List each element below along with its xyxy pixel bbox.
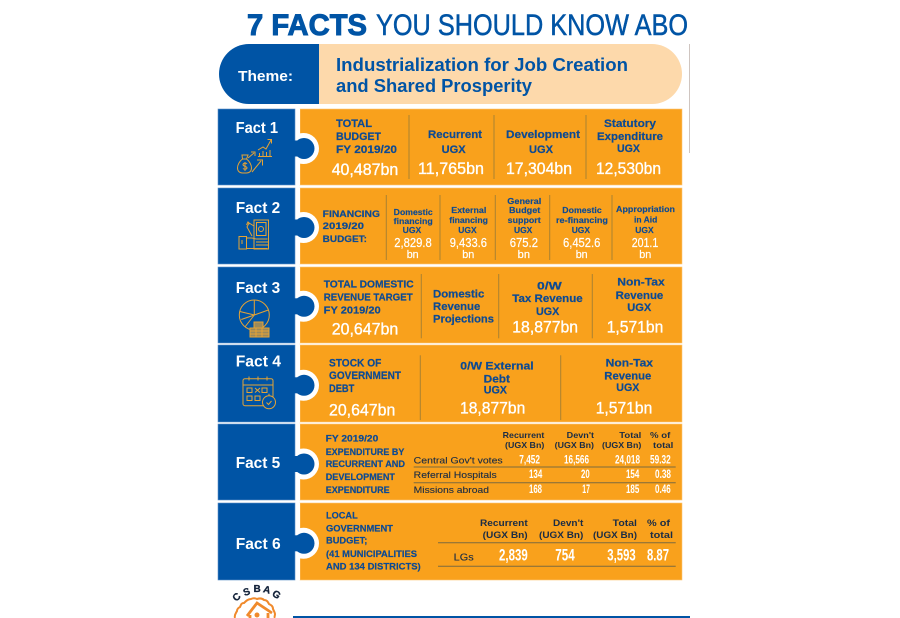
panel: fact 3: Tax Revenue	[512, 293, 583, 305]
panel: fact 2: BUDGET:	[323, 234, 367, 245]
panel: fact 2: bn	[462, 249, 474, 261]
panel: fact 5: Fact 5	[236, 455, 280, 472]
panel: fact 3	[218, 267, 682, 343]
table: local government budget: Recurrent	[480, 518, 529, 529]
logo: CSBAG: G	[270, 588, 283, 602]
panel: fact 5: EXPENDITURE	[326, 485, 390, 496]
panel: fact 2: bn	[576, 249, 588, 261]
panel: fact 1: Recurrent	[428, 129, 482, 141]
panel: fact 4: Fact 4	[236, 354, 281, 371]
panel: fact 5: FY 2019/20	[326, 434, 378, 445]
theme banner: and Shared Prosperity	[336, 76, 532, 96]
panel: fact 2: Domestic	[562, 205, 602, 215]
panel: fact 4: UGX	[616, 382, 640, 394]
panel: fact 3: Domestic	[433, 289, 484, 301]
table: expenditure by recurrent and development: 185	[626, 484, 640, 496]
panel: fact 3: Fact 3	[236, 280, 280, 297]
panel: fact 4: GOVERNMENT	[329, 370, 401, 382]
table: expenditure by recurrent and development: Total	[619, 430, 641, 440]
panel: fact 2: bn	[639, 249, 651, 261]
panel: fact 2: UGX	[458, 225, 477, 235]
panel: fact 2: 2019/20	[323, 221, 364, 232]
panel: fact 3: 18,877bn	[512, 318, 578, 337]
theme banner: Industrialization for Job Creation	[336, 55, 628, 75]
icon: calendar and stopwatch	[243, 376, 276, 409]
panel: fact 6: (41 MUNICIPALITIES	[326, 549, 417, 560]
panel: fact 3: Non-Tax	[617, 277, 666, 289]
table: expenditure by recurrent and development: total	[653, 440, 673, 450]
table: local government budget: LGs	[454, 552, 474, 564]
panel: fact 3: UGX	[627, 302, 652, 314]
table: expenditure by recurrent and development: 0.46	[655, 484, 671, 496]
panel: fact 6: BUDGET;	[326, 536, 367, 547]
panel: fact 1: Development	[506, 129, 580, 141]
panel: fact 3: Projections	[433, 314, 494, 326]
panel: fact 2: in Aid	[634, 215, 657, 225]
table: local government budget: (UGX Bn)	[539, 530, 583, 541]
table: local government budget: % of	[647, 518, 671, 529]
table: expenditure by recurrent and development	[414, 430, 676, 496]
panel: fact 5: DEVELOPMENT	[326, 472, 395, 483]
table: local government budget	[438, 518, 676, 566]
panel: fact 2: re-financing	[556, 215, 608, 225]
panel: fact 1: UGX	[529, 144, 554, 156]
panel: fact 6: GOVERNMENT	[326, 524, 393, 535]
table: expenditure by recurrent and development: 59.32	[650, 455, 671, 467]
footer rule	[293, 616, 690, 618]
table: expenditure by recurrent and development: Devn't	[567, 430, 594, 440]
title	[248, 14, 688, 36]
panel: fact 3: TOTAL DOMESTIC	[324, 279, 414, 291]
table: expenditure by recurrent and development: Central Gov't votes	[414, 456, 503, 467]
panel: fact 6: AND 134 DISTRICTS)	[326, 562, 421, 573]
table: expenditure by recurrent and development: 154	[626, 469, 640, 481]
panel: fact 2: Fact 2	[236, 200, 280, 217]
theme banner	[219, 44, 682, 104]
panel: fact 1: BUDGET	[336, 131, 381, 143]
panel: fact 2: financing	[449, 215, 488, 225]
panel: fact 4: 1,571bn	[596, 398, 652, 417]
panel: fact 1: TOTAL	[336, 118, 372, 130]
panel: fact 2: bn	[407, 249, 419, 261]
table: expenditure by recurrent and development: 168	[529, 484, 542, 496]
panel: fact 1: FY 2019/20	[336, 144, 397, 156]
table: expenditure by recurrent and development: 134	[529, 469, 543, 481]
panel: fact 2: bn	[518, 249, 530, 261]
title: YOU SHOULD KNOW ABO	[376, 9, 688, 42]
panel: fact 2: Budget	[509, 205, 540, 215]
panel: fact 2: UGX	[403, 225, 422, 235]
table: local government budget: (UGX Bn)	[593, 530, 637, 541]
panel: fact 4: UGX	[484, 385, 508, 397]
table: expenditure by recurrent and development: 7,452	[519, 455, 540, 467]
panel: fact 1: 17,304bn	[506, 159, 572, 178]
panel: fact 2: 201.1	[632, 235, 658, 250]
table: expenditure by recurrent and development: 20	[581, 469, 590, 481]
panel: fact 2: UGX	[635, 225, 654, 235]
table: expenditure by recurrent and development: (UGX Bn)	[505, 440, 544, 450]
panel: fact 1: Statutory	[604, 118, 657, 130]
panel: fact 6: LOCAL	[326, 511, 358, 522]
table: expenditure by recurrent and development: Recurrent	[503, 430, 544, 440]
table: local government budget: (UGX Bn)	[483, 530, 528, 541]
table: expenditure by recurrent and development: 24,018	[615, 455, 640, 467]
table: expenditure by recurrent and development: Missions abroad	[414, 485, 489, 496]
panel: fact 1: UGX	[442, 144, 466, 156]
panel: fact 2: UGX	[514, 225, 533, 235]
panel: fact 1: 12,530bn	[596, 159, 661, 178]
title: 7 FACTS	[247, 9, 367, 42]
panel: fact 1: Fact 1	[236, 120, 278, 137]
table: local government budget: Devn't	[553, 518, 584, 529]
table: local government budget: 8.87	[647, 547, 669, 565]
panel: fact 4: DEBT	[329, 383, 355, 395]
panel: fact 1: 40,487bn	[332, 160, 398, 179]
panel: fact 4	[218, 345, 682, 422]
icon: pie chart and coins	[239, 300, 269, 337]
panel: fact 6: Fact 6	[236, 536, 281, 553]
logo: CSBAG: S	[242, 586, 252, 599]
panel: fact 4: 20,647bn	[329, 400, 395, 419]
panel: fact 3: 1,571bn	[607, 318, 663, 337]
panel: fact 2: Appropriation	[616, 204, 675, 214]
panel: fact 3: REVENUE TARGET	[324, 291, 413, 303]
table: expenditure by recurrent and development: (UGX Bn)	[602, 440, 641, 450]
panel: fact 2: External	[451, 205, 486, 215]
logo: CSBAG: B	[254, 584, 261, 595]
panel: fact 1: 11,765bn	[418, 159, 484, 178]
panel: fact 4: Non-Tax	[606, 357, 654, 369]
panel: fact 4: 0/W External	[460, 360, 534, 372]
panel: fact 5: RECURRENT AND	[326, 459, 405, 470]
table: expenditure by recurrent and development: 16,566	[564, 455, 589, 467]
panel: fact 4: STOCK OF	[329, 358, 382, 370]
logo: CSBAG	[231, 584, 283, 618]
panel: fact 2: 2,829.8	[394, 235, 432, 250]
panel: fact 2: Domestic	[394, 207, 433, 217]
table: local government budget: 3,593	[607, 547, 636, 565]
table: expenditure by recurrent and development: % of	[650, 430, 670, 440]
panel: fact 1	[218, 109, 682, 185]
panel: fact 2: financing	[394, 216, 433, 226]
table: local government budget: 2,839	[499, 547, 528, 565]
table: local government budget: Total	[613, 518, 637, 529]
panel: fact 3: 20,647bn	[332, 319, 398, 338]
panel: fact 3: Revenue	[433, 301, 480, 313]
panel: fact 2: support	[508, 215, 541, 225]
table: local government budget: total	[650, 530, 673, 541]
panel: fact 6	[218, 503, 682, 580]
panel: fact 2: 675.2	[510, 235, 538, 250]
panel: fact 4: 18,877bn	[460, 398, 525, 417]
panel: fact 4: Revenue	[604, 370, 651, 382]
icon: hand holding cash	[239, 220, 268, 249]
panel: fact 5	[218, 424, 682, 500]
panel: fact 5: EXPENDITURE BY	[326, 447, 405, 458]
panel: fact 2: General	[507, 196, 541, 206]
table: expenditure by recurrent and development: (UGX Bn)	[555, 440, 594, 450]
theme banner: Theme:	[238, 68, 293, 85]
logo: CSBAG: A	[262, 584, 272, 597]
table: local government budget: 754	[555, 547, 575, 565]
panel: fact 3: 0/W	[537, 281, 562, 293]
panel: fact 1: UGX	[617, 143, 641, 155]
table: expenditure by recurrent and development: 17	[582, 484, 590, 496]
panel: fact 2: 6,452.6	[563, 235, 600, 250]
logo: CSBAG: C	[231, 591, 243, 604]
table: expenditure by recurrent and development: Referral Hospitals	[414, 470, 497, 481]
panel: fact 2: FINANCING	[323, 209, 380, 220]
panel: fact 4: Debt	[484, 373, 510, 385]
panel: fact 2	[218, 188, 682, 264]
panel: fact 3: UGX	[536, 306, 560, 318]
panel: fact 3: Revenue	[616, 290, 663, 302]
photo edge sliver	[689, 44, 690, 153]
panel: fact 3: FY 2019/20	[324, 304, 381, 316]
panel: fact 2: 9,433.6	[450, 235, 487, 250]
icon: money bag and growth chart	[238, 140, 272, 173]
panel: fact 1: Expenditure	[597, 131, 663, 143]
panel: fact 2: UGX	[572, 225, 590, 235]
table: expenditure by recurrent and development: 0.38	[655, 469, 671, 481]
